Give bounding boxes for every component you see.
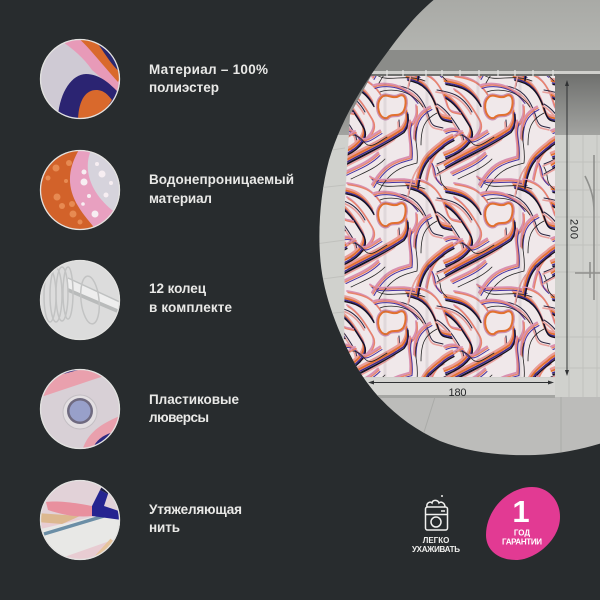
text: ЛЕГКО <box>423 536 449 545</box>
ceiling <box>389 0 600 50</box>
upper wall <box>338 74 600 136</box>
shower <box>575 155 600 300</box>
photo: water drops <box>38 148 124 232</box>
text <box>149 502 242 535</box>
text: ГОД <box>514 528 530 538</box>
number: 1 <box>512 494 530 529</box>
height dimension: 200 <box>568 219 580 239</box>
curtain rings <box>387 70 553 76</box>
photo: fabric swatch <box>40 38 120 120</box>
text <box>149 62 268 95</box>
floor <box>364 378 600 456</box>
feature: grommets <box>38 364 239 452</box>
text: в комплекте <box>149 300 232 315</box>
bathroom photo <box>300 0 600 467</box>
photo: hem thread <box>40 480 120 560</box>
width dimension: 180 <box>448 387 466 399</box>
text: материал <box>149 191 212 206</box>
warranty badge <box>486 487 560 560</box>
pink blob <box>486 487 560 560</box>
feature: material <box>38 36 268 124</box>
text: 12 колец <box>149 281 207 296</box>
text: Материал – 100% <box>149 62 268 77</box>
text: Водонепроницаемый <box>149 172 294 187</box>
feature: weight thread <box>36 478 242 562</box>
feature: rings <box>38 258 232 342</box>
text: нить <box>149 520 180 535</box>
text: УХАЖИВАТЬ <box>412 545 460 554</box>
text: Утяжеляющая <box>149 502 242 517</box>
curtain rod <box>372 71 600 74</box>
icon: washing machine <box>426 495 448 530</box>
text <box>149 172 294 206</box>
tiled wall <box>300 135 600 398</box>
photo: grommet <box>40 368 120 450</box>
text: ГАРАНТИИ <box>502 538 542 546</box>
easy care badge <box>412 495 460 554</box>
height dimension <box>565 80 580 376</box>
text: люверсы <box>149 410 209 425</box>
width dimension <box>368 380 554 399</box>
text <box>502 528 542 546</box>
feature: waterproof <box>38 148 294 232</box>
text <box>149 392 239 425</box>
text: полиэстер <box>149 80 219 95</box>
curtain <box>344 76 555 377</box>
text <box>149 281 232 315</box>
photo: rings on rod <box>38 258 122 342</box>
text: Пластиковые <box>149 392 239 407</box>
text <box>412 536 460 554</box>
